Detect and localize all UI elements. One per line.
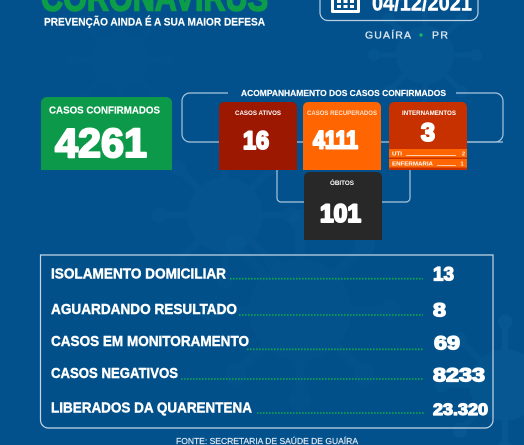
row: awaiting result: AGUARDANDO RESULTADO xyxy=(51,302,237,318)
row: ICU: UTI xyxy=(392,152,403,158)
row: ICU xyxy=(389,149,467,158)
row: ward: ENFERMARIA xyxy=(392,162,433,168)
icon: green dot xyxy=(419,33,423,37)
location xyxy=(365,28,448,42)
number: deaths: 101 xyxy=(320,200,361,228)
row: home isolation xyxy=(51,264,454,286)
row: monitoring xyxy=(51,334,460,354)
number: confirmed: 4261 xyxy=(55,120,147,166)
subtitle: PREVENÇÃO AINDA É A SUA MAIOR DEFESA xyxy=(44,16,265,28)
label: recovered: CASOS RECUPERADOS xyxy=(307,111,377,117)
row: monitoring: 69 xyxy=(434,334,460,354)
label: active: CASOS ATIVOS xyxy=(235,111,281,117)
number: recovered: 4111 xyxy=(313,126,358,154)
label: hospitalizations: INTERNAMENTOS xyxy=(402,111,456,117)
row: negative: 8233 xyxy=(433,366,485,386)
number: active: 16 xyxy=(243,127,269,155)
row: awaiting result xyxy=(51,300,446,322)
connector frame xyxy=(182,93,503,202)
row: home isolation: ISOLAMENTO DOMICILIAR xyxy=(51,266,227,282)
panel: confirmed cases xyxy=(41,97,172,170)
location: GUAÍRA xyxy=(365,28,411,42)
row: ward: 1 xyxy=(460,162,464,168)
panel: recovered xyxy=(303,102,381,170)
row: released: LIBERADOS DA QUARENTENA xyxy=(51,400,252,416)
label: deaths: ÓBITOS xyxy=(330,179,354,187)
row: home isolation: 13 xyxy=(433,264,454,286)
label: confirmed: CASOS CONFIRMADOS xyxy=(49,104,160,116)
panel: deaths xyxy=(304,172,382,240)
row: released: 23.320 xyxy=(433,400,488,419)
row: negative: CASOS NEGATIVOS xyxy=(51,366,178,382)
icon: calendar xyxy=(331,0,360,13)
row: monitoring: CASOS EM MONITORAMENTO xyxy=(51,334,249,350)
row: awaiting result: 8 xyxy=(433,300,446,322)
frame heading: ACOMPANHAMENTO DOS CASOS CONFIRMADOS xyxy=(241,88,446,98)
date box xyxy=(320,0,478,20)
row: negative xyxy=(51,366,485,386)
row: ICU: 2 xyxy=(462,152,465,158)
location: PR xyxy=(432,30,448,42)
row: released xyxy=(51,400,488,419)
panel: indicators xyxy=(40,255,493,428)
panel: hospitalizations xyxy=(389,102,467,170)
row: ward xyxy=(389,159,467,168)
panel: active cases xyxy=(219,102,297,170)
number: hospitalizations: 3 xyxy=(421,119,435,147)
